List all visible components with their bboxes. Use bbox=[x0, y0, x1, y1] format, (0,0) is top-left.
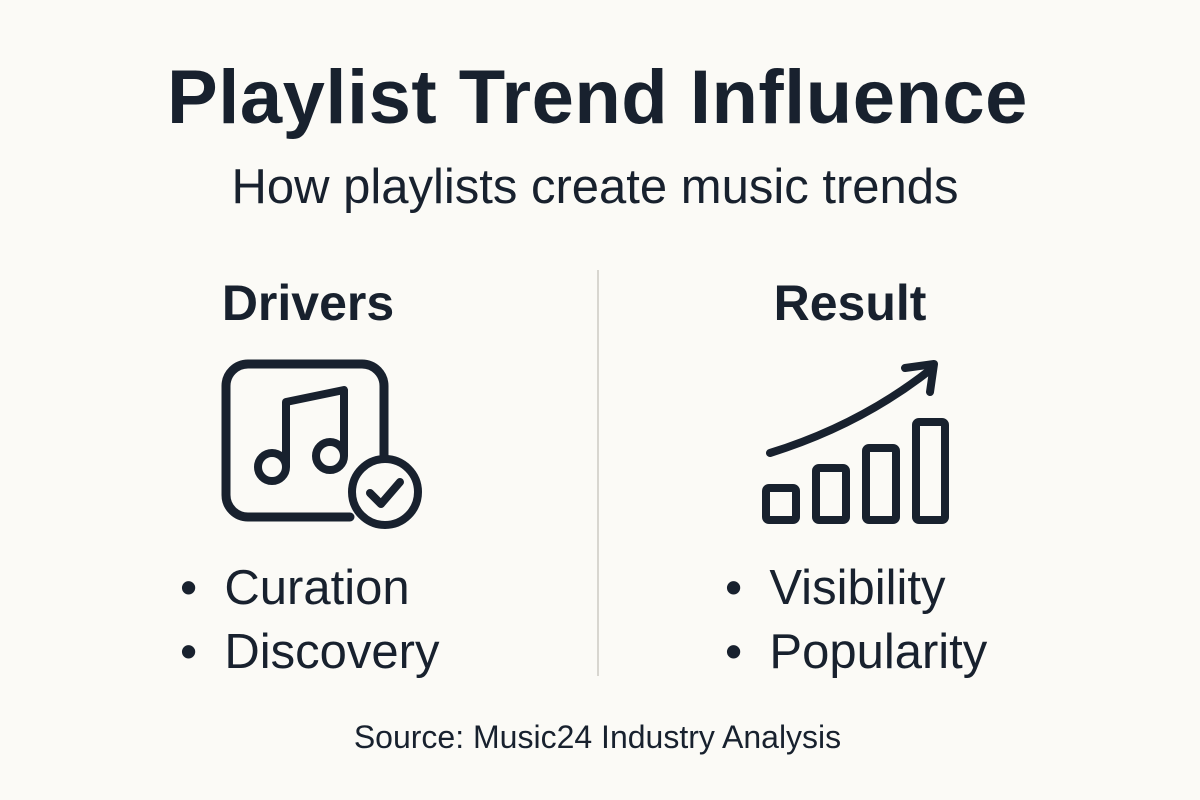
bullet list: drivers: • Discovery bbox=[180, 625, 439, 679]
bullet list: drivers: • Curation bbox=[180, 561, 410, 615]
icon: rising bar chart bbox=[762, 360, 949, 524]
title: Playlist Trend Influence bbox=[167, 55, 1028, 140]
subtitle: How playlists create music trends bbox=[231, 160, 959, 214]
bullet list: result: • Visibility bbox=[725, 561, 945, 615]
bullet list: drivers bbox=[180, 561, 440, 679]
source: Source: Music24 Industry Analysis bbox=[354, 719, 841, 755]
bullet list: result bbox=[725, 561, 988, 679]
bullet list: result: • Popularity bbox=[725, 625, 987, 679]
heading: result: Result bbox=[774, 275, 926, 331]
heading: drivers: Drivers bbox=[222, 275, 394, 331]
icon: music note with check bbox=[222, 360, 422, 529]
panel: drivers bbox=[180, 275, 440, 679]
panel: result bbox=[725, 275, 988, 679]
